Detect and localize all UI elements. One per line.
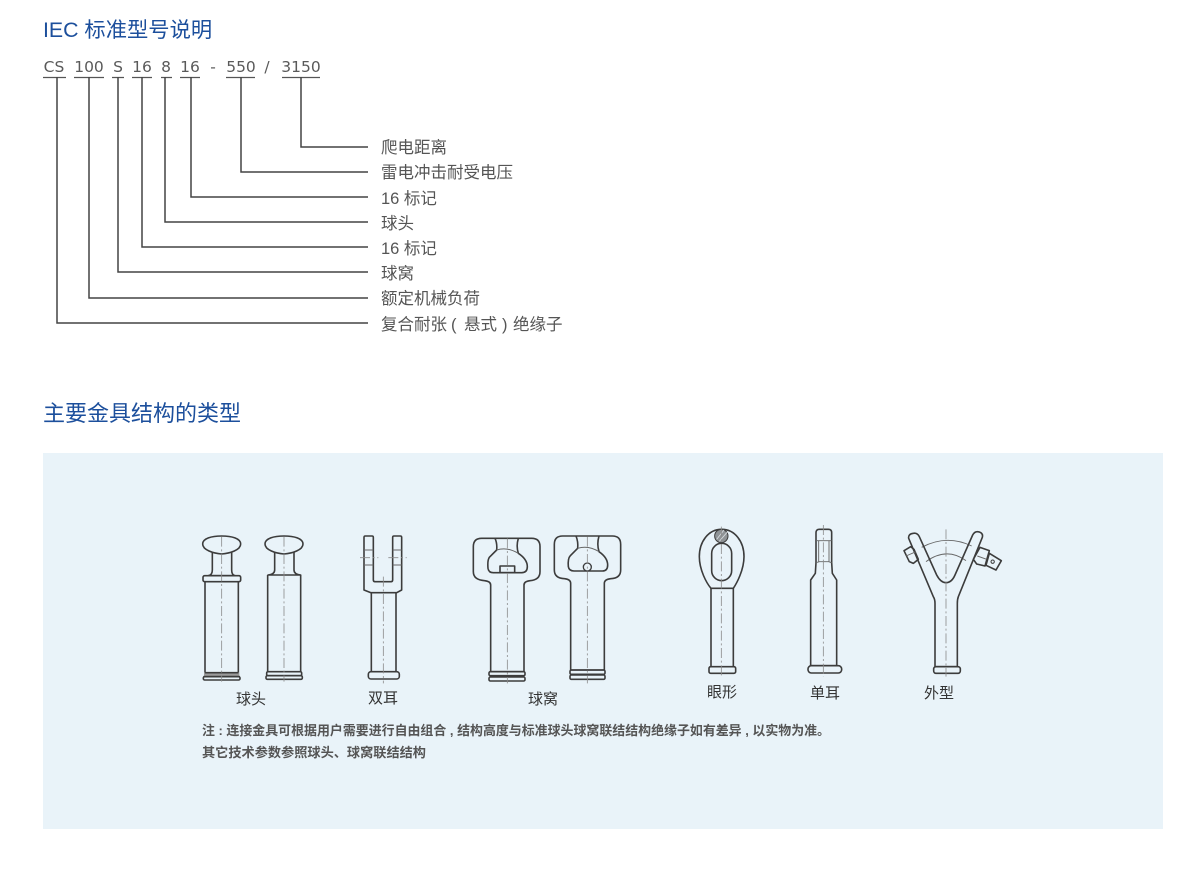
caption: socket: 球窝 xyxy=(528,690,558,708)
leader labels: 复合耐张 xyxy=(381,315,448,334)
caption: ball: 球头 xyxy=(236,691,266,708)
model code segments: 16 xyxy=(180,58,200,76)
model code segments: 16 xyxy=(132,58,152,76)
leader labels: ) xyxy=(502,316,508,334)
caption: single ear: 单耳 xyxy=(810,685,840,702)
model code segments: 8 xyxy=(161,58,171,76)
model code segments xyxy=(43,58,321,78)
leader labels: 雷电冲击耐受电压 xyxy=(381,163,513,182)
note text xyxy=(202,722,830,760)
icon: single ear fitting xyxy=(808,525,842,677)
heading: main fitting structure types: 主要金具结构的类型 xyxy=(43,401,241,426)
note text: 其它技术参数参照球头、球窝联结结构 xyxy=(202,744,426,760)
model code segments: 100 xyxy=(74,58,104,76)
model code segments: 3150 xyxy=(281,58,321,76)
leader labels: 爬电距离 xyxy=(381,138,447,157)
caption: double ear: 双耳 xyxy=(368,690,398,707)
model code segments: CS xyxy=(44,58,64,76)
leader labels: 球窝 xyxy=(381,264,414,283)
icon: double ear fitting xyxy=(360,536,407,683)
icon: eye fitting xyxy=(699,527,744,677)
title: IEC model designation: IEC 标准型号说明 xyxy=(43,18,212,42)
model code segments: S xyxy=(113,58,123,76)
icon: outer Y fitting xyxy=(904,529,1001,677)
caption: outer type: 外型 xyxy=(924,685,954,702)
caption: eye: 眼形 xyxy=(707,684,737,701)
note text: 注 : 连接金具可根据用户需要进行自由组合 , 结构高度与标准球头球窝联结结构绝缘子如有差异 , 以实物为准。 xyxy=(202,722,830,738)
leader labels: 16 标记 xyxy=(381,239,437,258)
model code segments: 550 xyxy=(226,58,256,76)
icon: socket fittings xyxy=(473,536,621,683)
icon: ball fittings xyxy=(203,536,303,682)
leader labels: 悬式 xyxy=(464,315,497,334)
leader labels xyxy=(381,138,562,334)
leader lines xyxy=(57,77,368,323)
panel: fitting types xyxy=(43,453,1163,829)
leader labels: 16 标记 xyxy=(381,189,437,208)
model code designation diagram xyxy=(43,58,562,334)
leader labels: 球头 xyxy=(381,214,414,233)
leader labels: 额定机械负荷 xyxy=(381,289,480,308)
leader labels: 绝缘子 xyxy=(513,315,562,334)
model code segments: - xyxy=(210,58,216,76)
model code segments: / xyxy=(264,58,270,76)
leader labels: ( xyxy=(451,316,457,334)
